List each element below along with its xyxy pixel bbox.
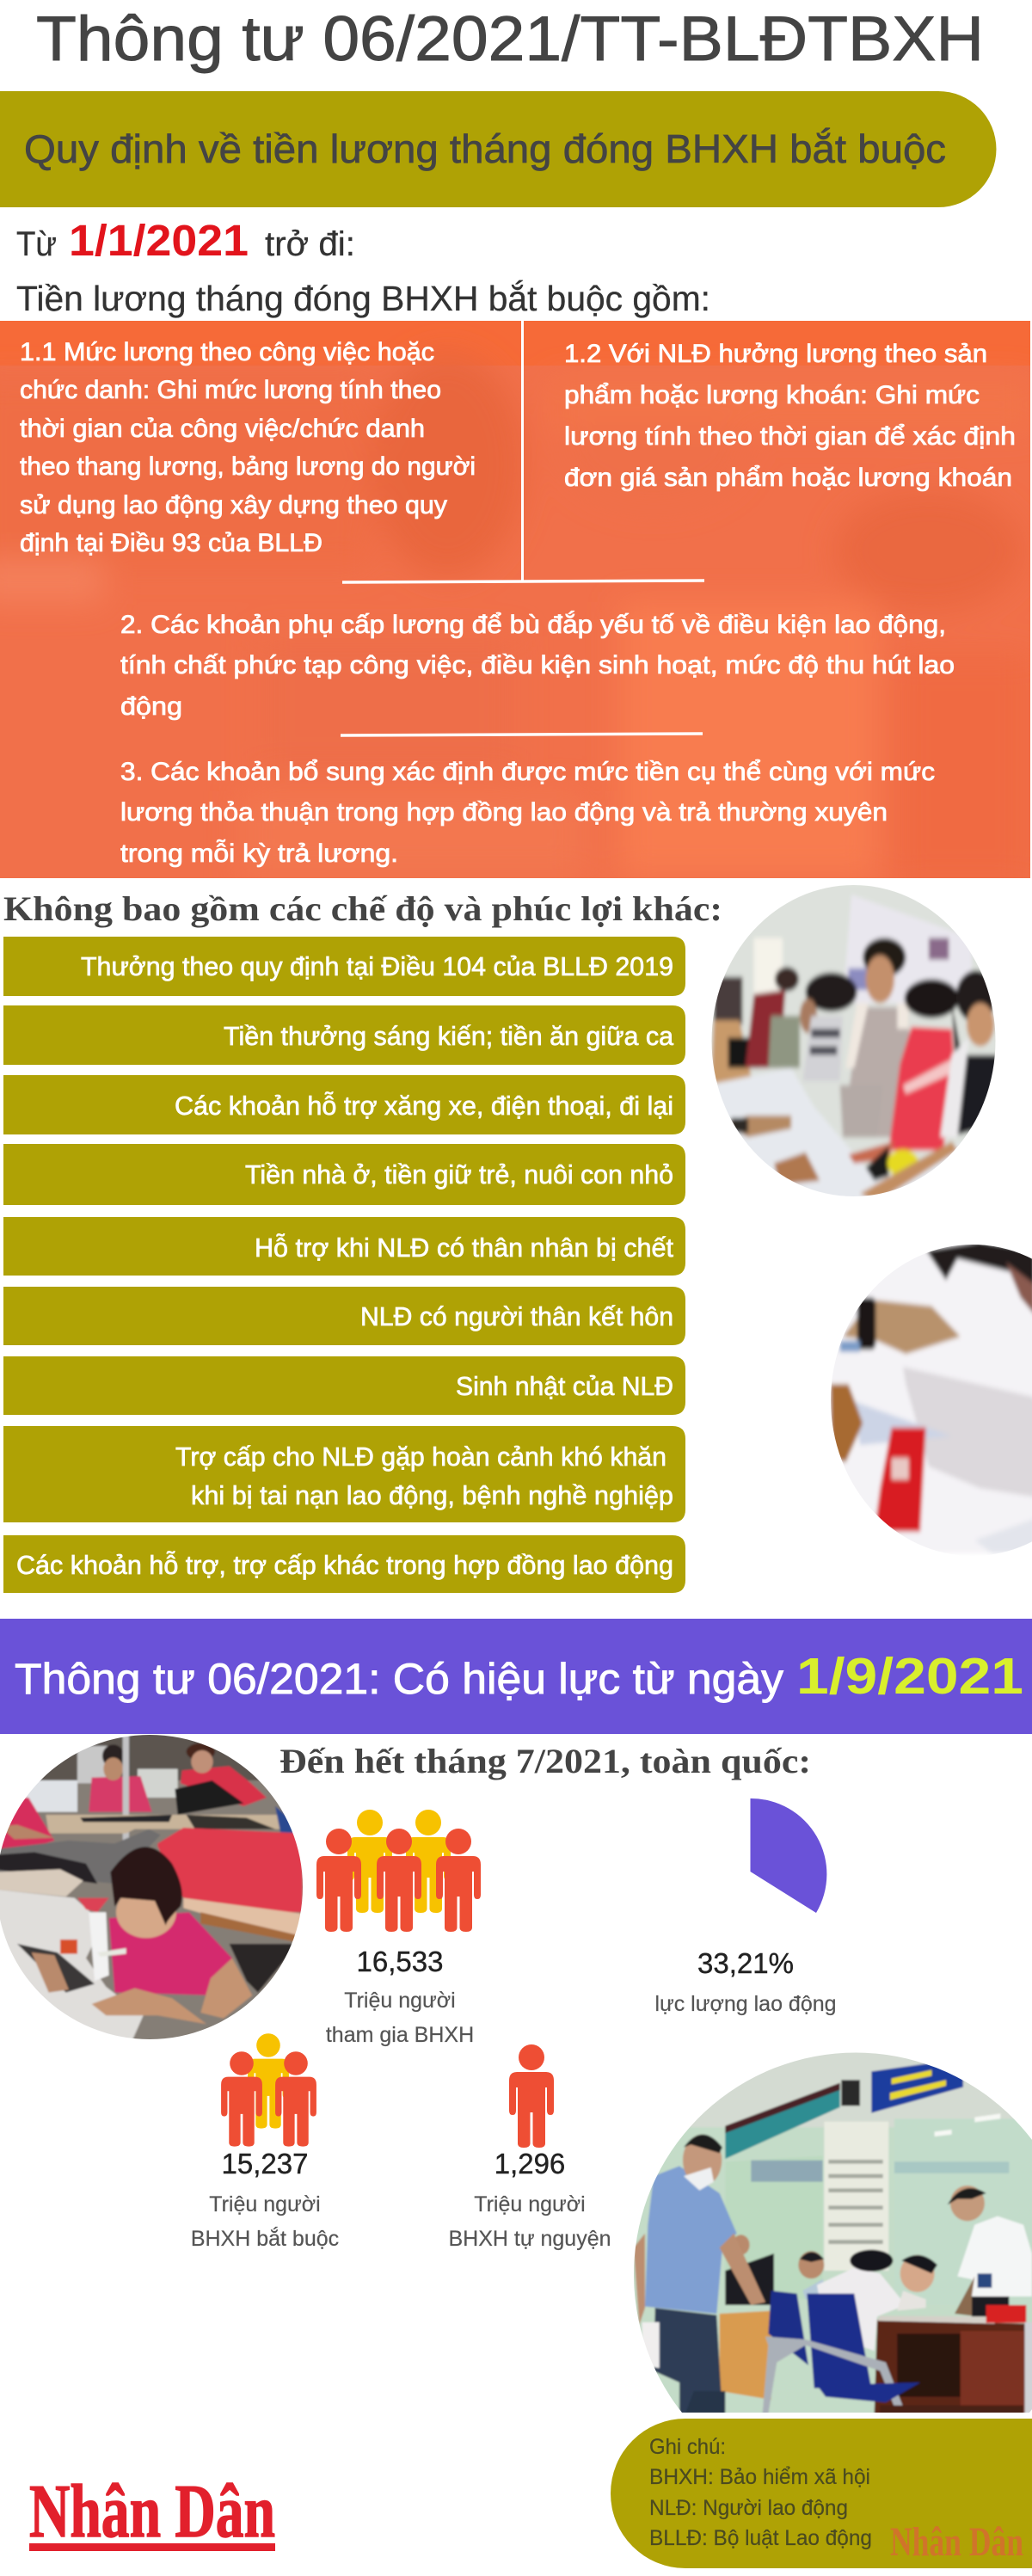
bar 3: Các khoản hỗ trợ xăng xe, điện thoại, đi lại	[175, 1091, 673, 1121]
list: excluded benefits bars	[3, 937, 685, 1593]
stat: 16,533 participants	[326, 1946, 474, 2047]
chart: pie sector 33,21%	[750, 1798, 826, 1913]
notes box: abbreviations: BLLĐ: Bộ luật Lao động	[649, 2526, 872, 2550]
bar 9: Các khoản hỗ trợ, trợ cấp khác trong hợp đồng lao động	[16, 1550, 673, 1580]
bar 2	[3, 1005, 685, 1065]
bar 3	[3, 1075, 685, 1134]
stat: 33,21% labour force	[654, 1947, 837, 2016]
bar 1: Thưởng theo quy định tại Điều 104 của BLLĐ 2019	[81, 951, 673, 981]
heading: by end of July 2021: Đến hết tháng 7/2021, toàn quốc:	[280, 1742, 811, 1780]
bar 4	[3, 1144, 685, 1205]
bar 6: NLĐ có người thân kết hôn	[360, 1301, 673, 1331]
text: item 3: trong mỗi kỳ trả lương.	[120, 839, 398, 868]
stat: 1,296 voluntary	[448, 2148, 611, 2251]
bar 4: Tiền nhà ở, tiền giữ trẻ, nuôi con nhỏ	[245, 1159, 673, 1190]
text: item 1.2: 1.2 Với NLĐ hưởng lương theo sản	[564, 340, 987, 368]
text: item 2	[120, 611, 955, 721]
bar 8: Trợ cấp cho NLĐ gặp hoàn cảnh khó khăn	[175, 1442, 666, 1472]
effective date line: trở đi:	[265, 225, 355, 263]
stat: 33,21% labour force: 33,21%	[697, 1947, 794, 1979]
text: item 3: 3. Các khoản bổ sung xác định được mức tiền cụ thể cùng với mức	[120, 758, 935, 786]
stat: 15,237 compulsory: BHXH bắt buộc	[191, 2226, 339, 2251]
bar 1	[3, 937, 685, 996]
icon: people group 15,237	[221, 2033, 316, 2147]
logo: Nhân Dân: Nhân Dân	[29, 2470, 275, 2554]
stat: 16,533 participants: tham gia BHXH	[326, 2023, 474, 2047]
banner: effective date: Thông tư 06/2021: Có hiệu lực từ ngày	[15, 1655, 783, 1703]
text: item 1.2: đơn giá sản phẩm hoặc lương khoán	[564, 464, 1012, 492]
stat: 1,296 voluntary: BHXH tự nguyện	[448, 2227, 611, 2251]
text: item 1.2: phẩm hoặc lương khoán: Ghi mức	[564, 381, 980, 409]
text: item 1.1: định tại Điều 93 của BLLĐ	[20, 529, 322, 557]
notes box: abbreviations: Ghi chú:	[649, 2435, 726, 2459]
banner: subtitle	[0, 91, 996, 207]
photo: garment workers	[0, 1731, 307, 2041]
photo: people filing documents	[705, 882, 1004, 1202]
subheading: salary includes: Tiền lương tháng đóng BHXH bắt buộc gồm:	[16, 279, 710, 318]
banner: subtitle: Quy định về tiền lương tháng đóng BHXH bắt buộc	[24, 126, 946, 171]
bar 7	[3, 1356, 685, 1415]
bar 8: khi bị tai nạn lao động, bệnh nghề nghiệp	[191, 1480, 673, 1510]
stat: 33,21% labour force: lực lượng lao động	[654, 1992, 837, 2016]
stat: 16,533 participants: 16,533	[357, 1946, 443, 1977]
bar 7: Sinh nhật của NLĐ	[456, 1371, 673, 1401]
title: Thông tư 06/2021/TT-BLĐTBXH	[36, 4, 984, 74]
bar 5	[3, 1217, 685, 1276]
notes box: abbreviations: NLĐ: Người lao động	[649, 2496, 848, 2520]
effective date line	[16, 216, 355, 265]
icon: people group 16,533	[316, 1810, 481, 1932]
text: item 1.2	[564, 340, 1016, 492]
text: item 2: động	[120, 692, 182, 721]
stat: 1,296 voluntary: Triệu người	[474, 2192, 586, 2216]
text: item 1.1: sử dụng lao động xây dựng theo quy	[20, 491, 447, 520]
bar 5: Hỗ trợ khi NLĐ có thân nhân bị chết	[255, 1233, 673, 1263]
text: item 3: lương thỏa thuận trong hợp đồng lao động và trả thường xuyên	[120, 798, 888, 827]
text: item 1.1: chức danh: Ghi mức lương tính theo	[20, 376, 441, 404]
bar 9	[3, 1535, 685, 1593]
icon: single person 1,296	[509, 2044, 554, 2148]
text: item 3	[120, 758, 935, 868]
effective date line: Từ	[16, 225, 57, 263]
text: item 2: tính chất phức tạp công việc, điều kiện sinh hoạt, mức độ thu hút lao	[120, 651, 955, 679]
stat: 15,237 compulsory: 15,237	[222, 2148, 308, 2179]
notes box: abbreviations: BHXH: Bảo hiểm xã hội	[649, 2465, 870, 2489]
text: item 1.1: 1.1 Mức lương theo công việc hoặc	[20, 338, 434, 366]
effective date line: 1/1/2021	[69, 216, 249, 265]
stat: 15,237 compulsory: Triệu người	[209, 2192, 321, 2216]
banner: effective date	[0, 1619, 1032, 1734]
photo: social insurance counter	[628, 2047, 1032, 2419]
stat: 15,237 compulsory	[191, 2148, 339, 2251]
bar 2: Tiền thưởng sáng kiến; tiền ăn giữa ca	[224, 1021, 674, 1051]
photo: hands on paperwork	[826, 1241, 1032, 1553]
text: item 2: 2. Các khoản phụ cấp lương để bù đắp yếu tố về điều kiện lao động,	[120, 611, 946, 639]
banner: effective date: 1/9/2021	[796, 1648, 1023, 1705]
panel: orange salary components	[0, 321, 1032, 886]
text: item 1.1: theo thang lương, bảng lương do người	[20, 452, 476, 481]
stat: 1,296 voluntary: 1,296	[494, 2148, 565, 2179]
bar 8	[3, 1426, 685, 1522]
text: item 1.1	[20, 338, 476, 557]
text: item 1.1: thời gian của công việc/chức danh	[20, 415, 425, 443]
text: item 1.2: lương tính theo thời gian để xác định	[564, 422, 1016, 451]
heading: excluded benefits: Không bao gồm các chế độ và phúc lợi khác:	[3, 889, 722, 928]
bar 6	[3, 1287, 685, 1345]
stat: 16,533 participants: Triệu người	[344, 1989, 456, 2013]
notes box: abbreviations	[611, 2419, 1032, 2568]
